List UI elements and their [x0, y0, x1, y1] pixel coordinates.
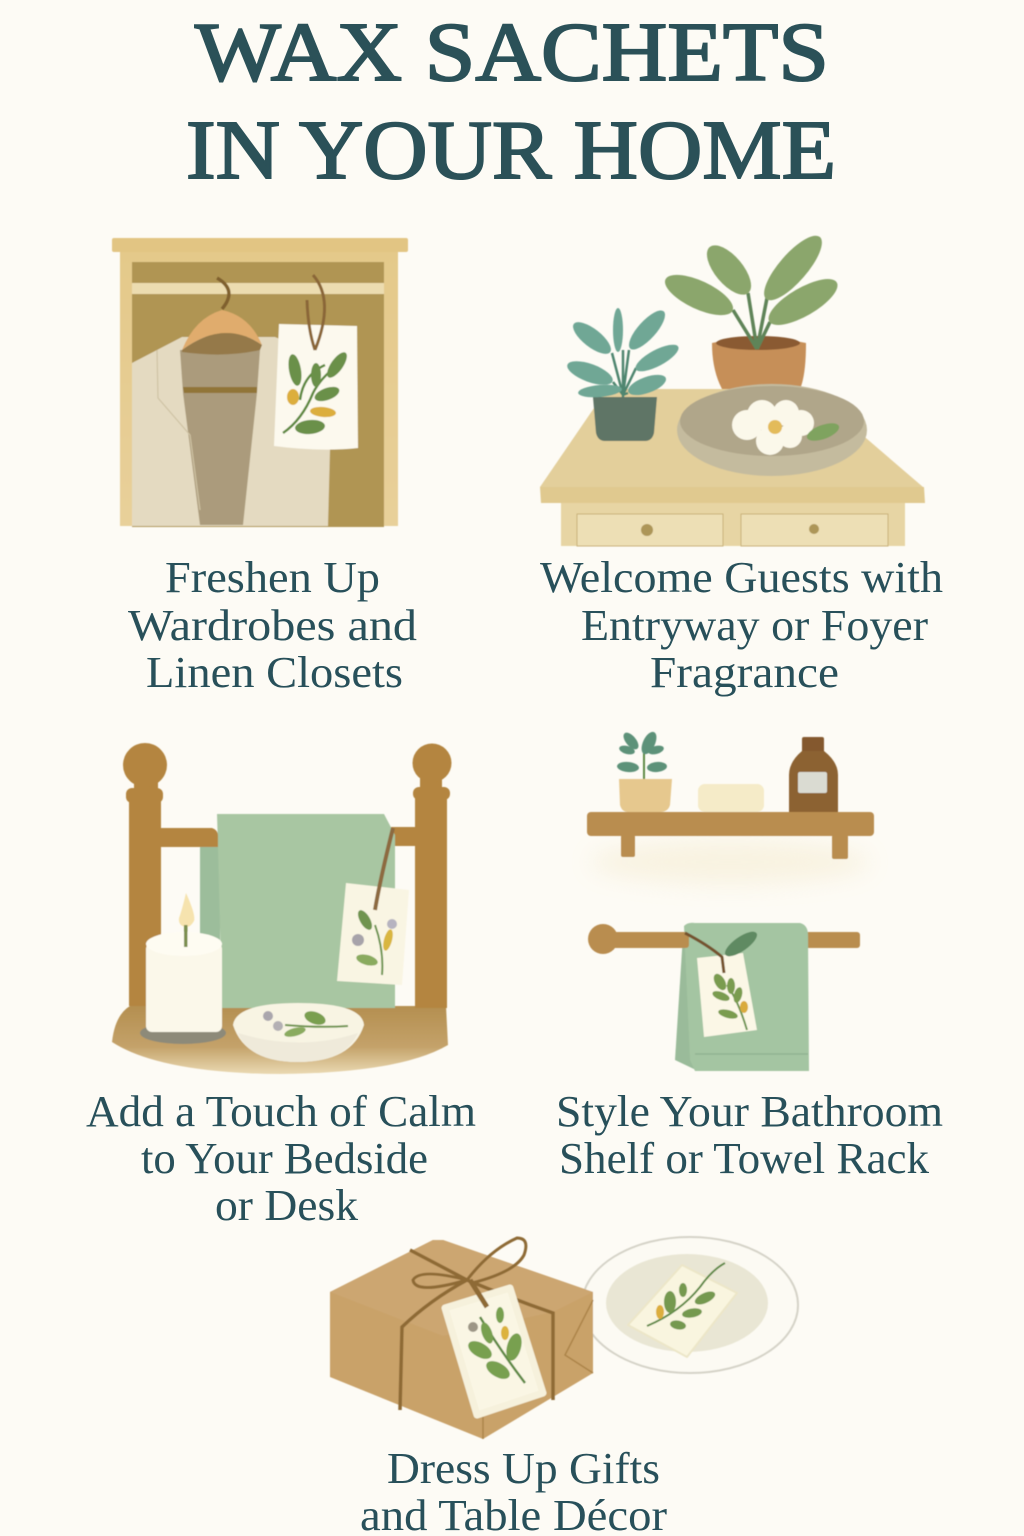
- title: WAX SACHETS: [195, 6, 829, 99]
- caption: entryway: [540, 553, 943, 697]
- caption: wardrobes: [128, 553, 417, 697]
- towel: [200, 847, 220, 1008]
- robe: [132, 337, 330, 526]
- icon: dish: [233, 1003, 364, 1062]
- icon: sachet tag: [337, 828, 409, 985]
- caption: bedside: Add a Touch of Calm: [86, 1087, 476, 1136]
- bed frame: [123, 743, 452, 1008]
- caption: entryway: Fragrance: [650, 648, 839, 697]
- icon: bottle: [789, 737, 838, 812]
- panel: bathroom illustration: [587, 730, 874, 1071]
- caption: bathroom: Style Your Bathroom: [556, 1087, 943, 1136]
- icon: tag: [685, 927, 761, 1037]
- caption: bathroom: Shelf or Towel Rack: [559, 1134, 929, 1183]
- icon: hanging sachet: [274, 275, 358, 450]
- caption: wardrobes: Wardrobes and: [128, 601, 417, 650]
- caption: wardrobes: Freshen Up: [165, 553, 380, 602]
- panel: bedside illustration: [112, 743, 452, 1074]
- caption: gifts: [360, 1444, 667, 1536]
- shelf: [587, 812, 874, 859]
- towel: [675, 923, 809, 1071]
- icon: gift tag: [445, 1280, 543, 1415]
- caption: bedside: to Your Bedside: [141, 1134, 428, 1183]
- caption: wardrobes: Linen Closets: [146, 648, 403, 697]
- towel rack left bar: [588, 924, 689, 954]
- icon: small plant: [617, 730, 672, 812]
- caption: entryway: Entryway or Foyer: [581, 601, 928, 650]
- title: IN YOUR HOME: [186, 104, 836, 197]
- panel: wardrobe illustration: [112, 238, 408, 527]
- caption: entryway: Welcome Guests with: [540, 553, 943, 602]
- icon: soap: [698, 784, 764, 812]
- icon: plate with sachet: [582, 1237, 798, 1373]
- icon: bowl with flower: [677, 384, 867, 476]
- caption: bedside: [86, 1087, 476, 1230]
- icon: gift box: [330, 1238, 593, 1439]
- caption: bathroom: [556, 1087, 943, 1183]
- icon: large plant: [660, 228, 844, 389]
- icon: candle: [140, 893, 226, 1044]
- caption: gifts: Dress Up Gifts: [387, 1444, 660, 1493]
- panel: entryway illustration: [540, 228, 925, 546]
- panel: gift illustration: [330, 1237, 798, 1439]
- towel rack right bar: [800, 932, 860, 948]
- icon: hanger: [182, 278, 262, 355]
- icon: small plant: [564, 305, 682, 441]
- rail: [160, 828, 218, 847]
- caption: bedside: or Desk: [215, 1181, 358, 1230]
- title: [186, 6, 836, 197]
